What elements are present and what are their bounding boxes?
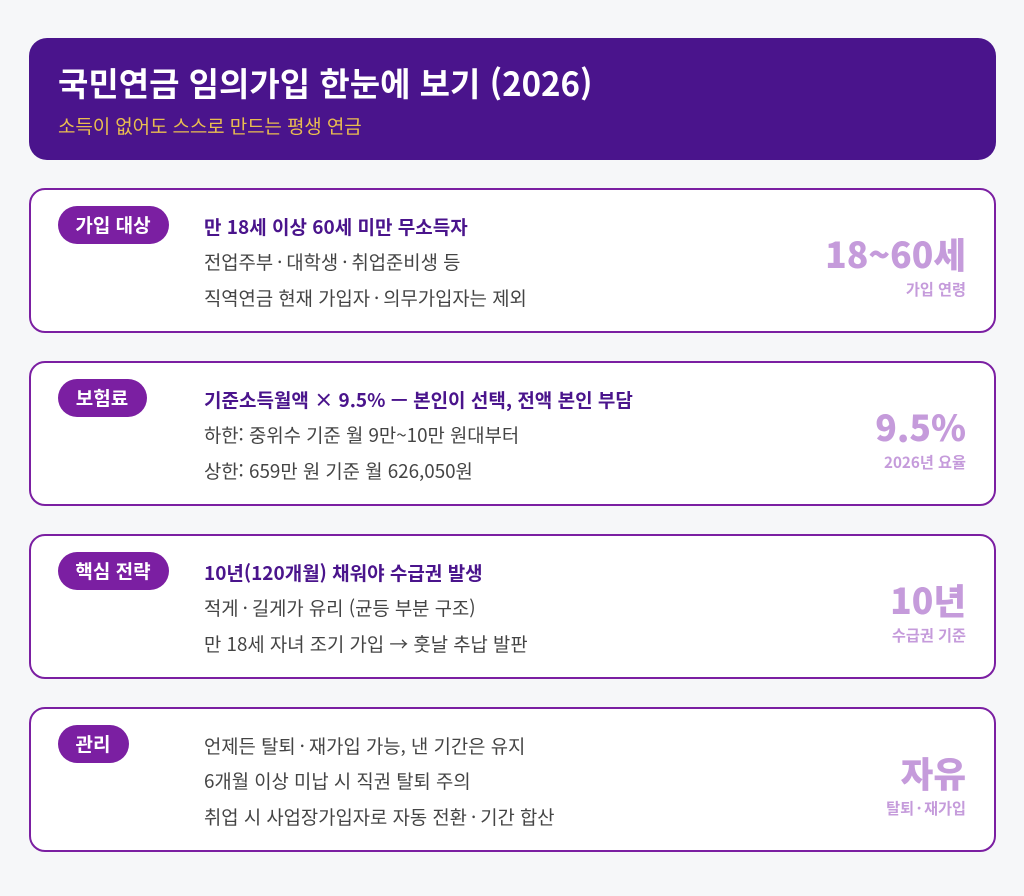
panel: 관리 (29, 707, 996, 852)
detail line 3: 취업 시 사업장가입자로 자동 전환·기간 합산 (204, 803, 555, 830)
title: 국민연금 임의가입 한눈에 보기 (2026) (58, 58, 592, 106)
badge: 관리 (76, 730, 110, 757)
headline: 만 18세 이상 60세 미만 무소득자 (204, 213, 468, 240)
detail line 2: 직역연금 현재 가입자·의무가입자는 제외 (204, 284, 527, 311)
key figure caption: 가입 연령 (906, 278, 966, 300)
badge (58, 379, 147, 417)
badge (58, 206, 169, 244)
panel: 보험료 (29, 361, 996, 506)
header banner (29, 38, 996, 160)
panel: 핵심 전략 (29, 534, 996, 679)
detail line 2: 6개월 이상 미납 시 직권 탈퇴 주의 (204, 767, 471, 794)
key figure caption: 탈퇴·재가입 (886, 796, 966, 818)
key figure: 10년 (890, 574, 966, 625)
key figure caption: 2026년 요율 (884, 450, 966, 472)
detail line 1: 하한: 중위수 기준 월 9만~10만 원대부터 (204, 421, 519, 448)
key figure: 자유 (901, 747, 966, 798)
detail line 1: 전업주부·대학생·취업준비생 등 (204, 248, 460, 275)
detail line 1: 언제든 탈퇴·재가입 가능, 낸 기간은 유지 (204, 732, 525, 759)
badge: 핵심 전략 (75, 557, 151, 584)
badge: 보험료 (76, 384, 128, 411)
key figure caption: 수급권 기준 (892, 624, 966, 646)
badge (58, 725, 129, 763)
headline: 기준소득월액 × 9.5% — 본인이 선택, 전액 본인 부담 (204, 386, 633, 413)
headline: 10년(120개월) 채워야 수급권 발생 (204, 559, 483, 586)
detail line 1: 적게·길게가 유리 (균등 부분 구조) (204, 594, 476, 621)
badge: 가입 대상 (75, 211, 151, 238)
badge (58, 552, 169, 590)
detail line 2: 만 18세 자녀 조기 가입 → 훗날 추납 발판 (204, 630, 528, 657)
subtitle: 소득이 없어도 스스로 만드는 평생 연금 (58, 112, 362, 139)
panel: 가입 대상 (29, 188, 996, 333)
key figure: 9.5% (875, 401, 966, 452)
key figure: 18~60세 (825, 228, 966, 279)
detail line 2: 상한: 659만 원 기준 월 626,050원 (204, 457, 473, 484)
